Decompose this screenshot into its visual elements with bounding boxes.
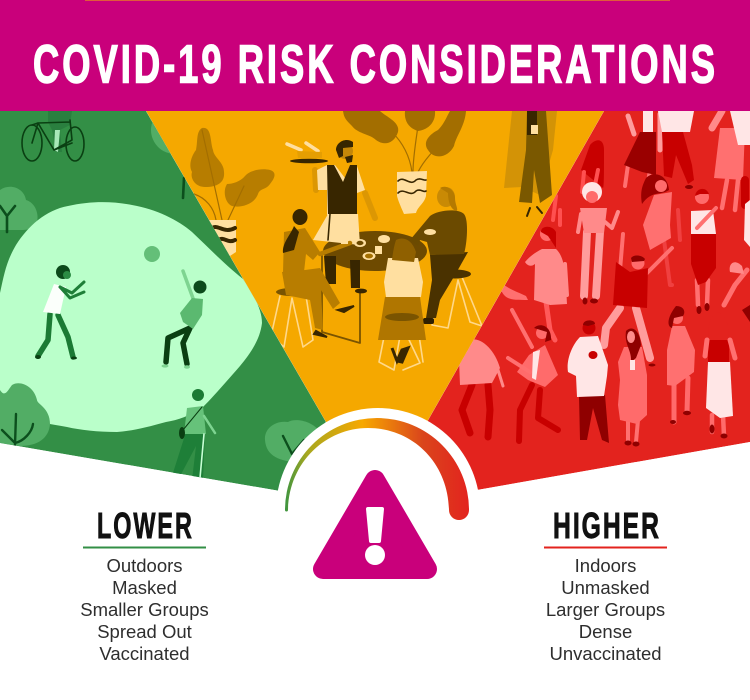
woman in pink dress facing away	[525, 227, 567, 340]
lower risk column	[80, 507, 209, 664]
blonde woman in pink	[578, 182, 618, 304]
list: higher risk factors: Indoors	[575, 555, 636, 576]
seated man with sweater	[410, 187, 482, 328]
heading: higher: HIGHER	[553, 505, 661, 546]
list: lower risk factors: Spread Out	[97, 621, 192, 642]
light green clearing	[0, 202, 262, 432]
standing person in coat	[504, 111, 557, 216]
list: lower risk factors: Vaccinated	[99, 643, 190, 664]
list: higher risk factors	[546, 555, 665, 664]
walker with bag and cane	[172, 389, 215, 480]
woman in white skirt seen from behind	[705, 312, 735, 438]
tree top left	[0, 187, 38, 232]
upper potted plant	[343, 111, 466, 214]
heading: lower: LOWER	[97, 507, 194, 546]
seated woman from behind	[378, 238, 426, 370]
list: lower risk factors: Outdoors	[106, 555, 183, 576]
woman bending, pink sweater	[459, 282, 528, 437]
woman in pink tunic and dark hair	[667, 306, 695, 424]
dancer in red shirt	[604, 234, 672, 366]
woman in pinafore dress	[641, 174, 680, 285]
seated woman	[271, 209, 354, 347]
list: lower risk factors: Masked	[112, 577, 177, 598]
table	[322, 231, 427, 343]
tree top near diagonal	[151, 122, 186, 200]
man in white hoodie	[568, 320, 609, 443]
bicycle and rider	[22, 111, 84, 161]
hat person on right edge	[724, 200, 750, 322]
person throwing, green top	[162, 271, 206, 369]
list: lower risk factors	[80, 555, 209, 664]
white dial backing	[276, 408, 480, 612]
panel: lower risk outdoor park scene	[0, 106, 326, 491]
list: higher risk factors: Unvaccinated	[549, 643, 662, 664]
top crowd: man in white shirt	[658, 111, 694, 189]
title banner	[0, 0, 750, 111]
left potted plant	[190, 128, 275, 256]
panel: medium risk cafe scene	[146, 111, 604, 440]
woman in white top and dark red trousers	[691, 189, 716, 314]
list: lower risk factors: Smaller Groups	[80, 599, 209, 620]
ball	[144, 246, 160, 262]
list: higher risk factors: Dense	[579, 621, 632, 642]
tree bottom left	[0, 383, 50, 446]
panel: higher risk crowd scene	[427, 111, 750, 490]
list: higher risk factors: Larger Groups	[546, 599, 665, 620]
top crowd: woman in pink dress	[712, 111, 750, 210]
warning triangle icon	[323, 480, 427, 569]
title: COVID-19 RISK CONSIDERATIONS	[33, 33, 718, 94]
woman dancing in jacket	[508, 310, 558, 441]
higher risk column	[544, 505, 667, 664]
risk gauge arc, green to red	[285, 418, 469, 520]
tree bottom right	[265, 420, 320, 462]
woman in long pink dress	[618, 329, 647, 446]
partygoer near diagonal, dark red	[553, 140, 604, 225]
top crowd: woman in dark skirt	[624, 111, 660, 186]
list: higher risk factors: Unmasked	[561, 577, 650, 598]
waiter	[287, 140, 375, 293]
table setting cups and plates	[341, 235, 390, 260]
person catching, white tank	[35, 265, 84, 360]
